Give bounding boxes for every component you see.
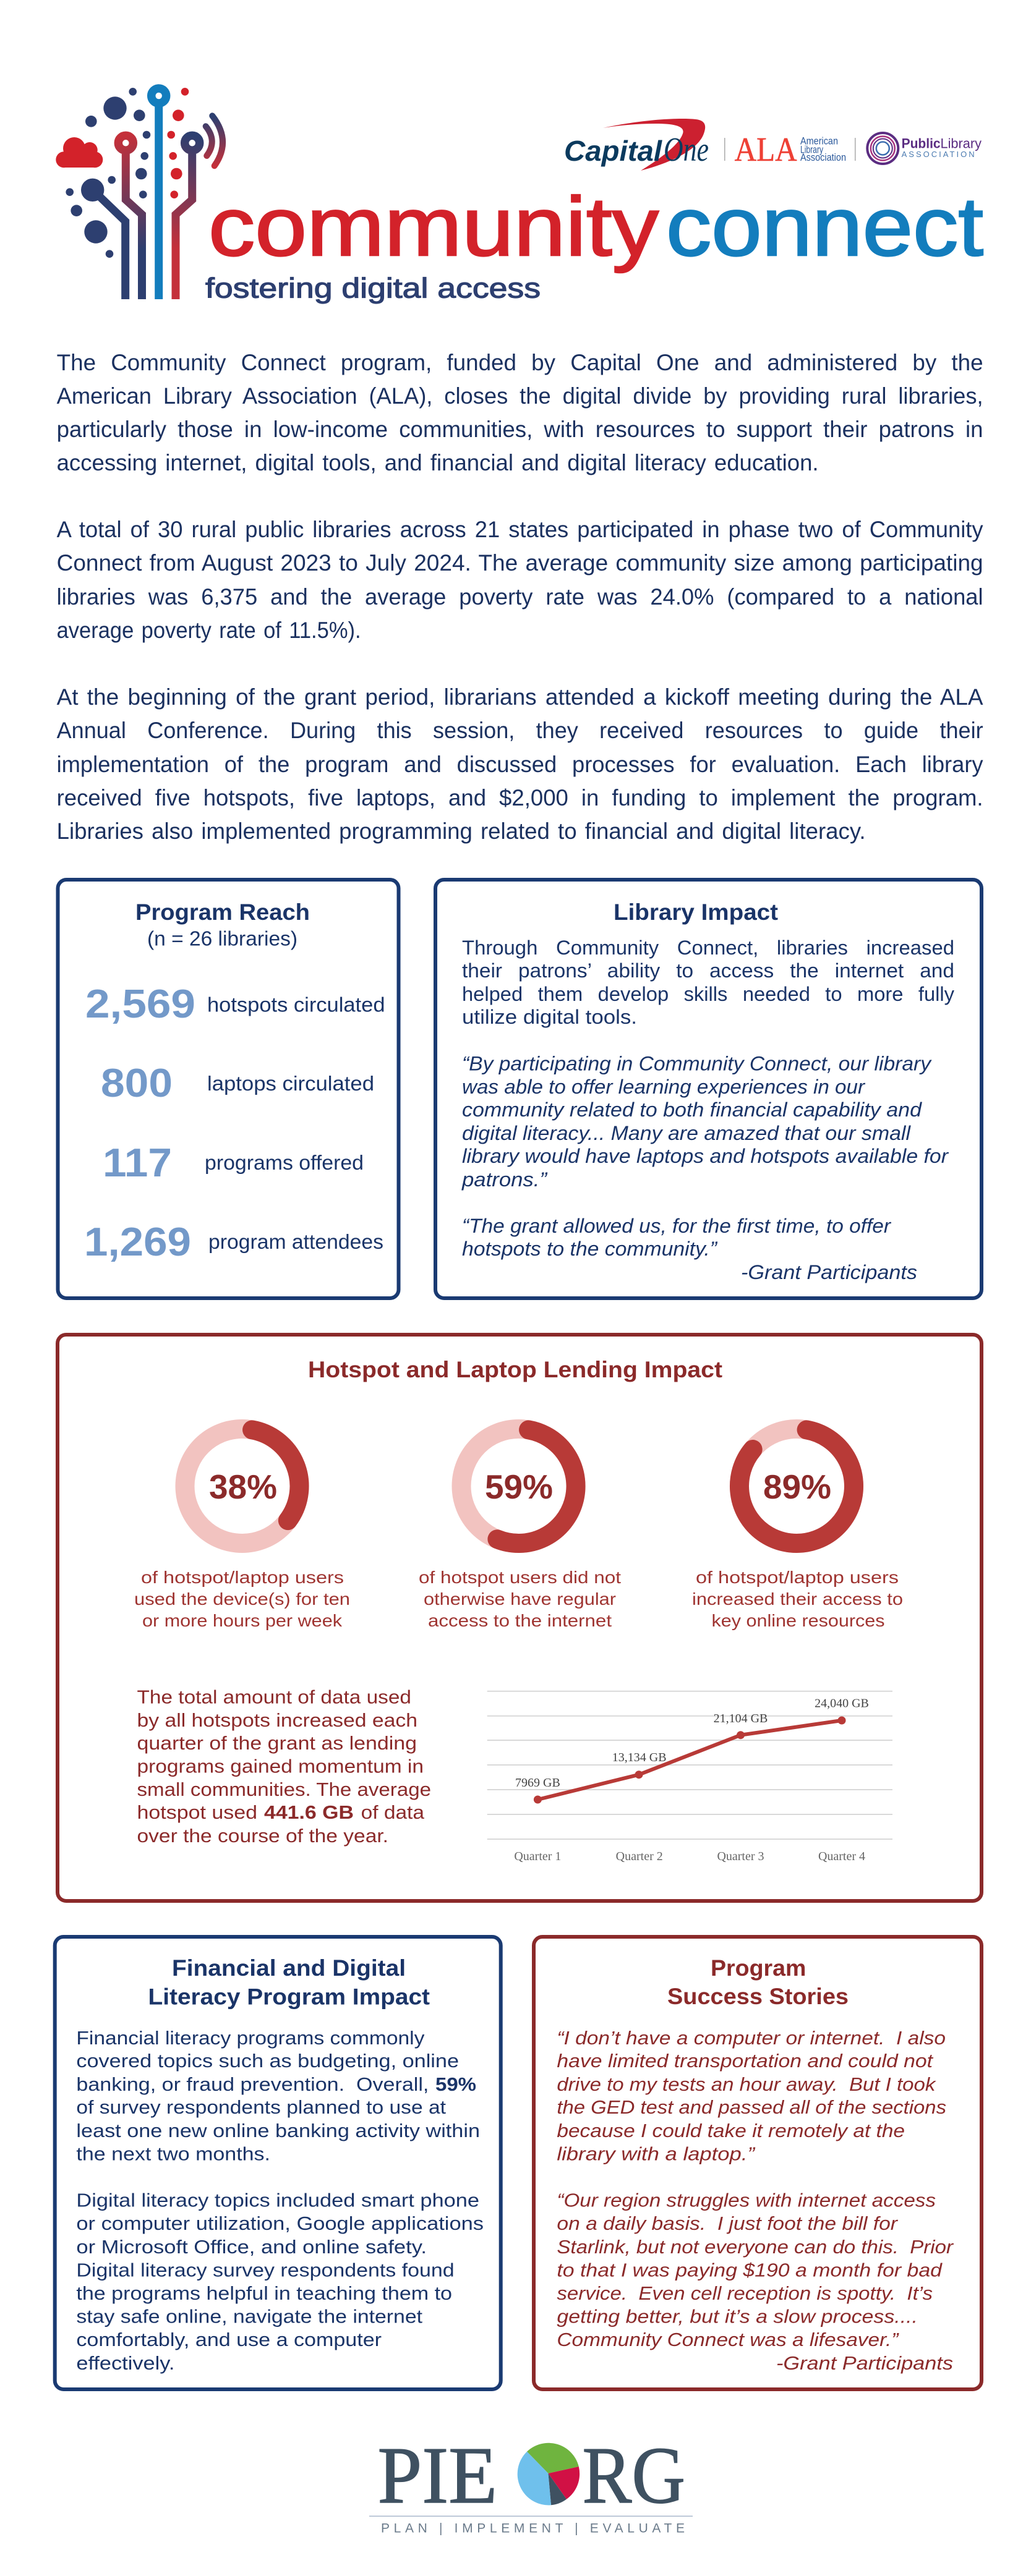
caption: 38 percent [134, 1568, 350, 1630]
donut: 59 percent: 59% [485, 1468, 553, 1506]
text block: digital literacy: comfortably, and use a computer [76, 2329, 382, 2350]
donut: 89 percent: 89% [763, 1468, 831, 1506]
caption: 59 percent: of hotspot users did not [419, 1568, 621, 1587]
stat: hotspots circulated: hotspots circulated [207, 993, 385, 1016]
text block: impact summary: helped them develop skills needed to more fully [462, 983, 954, 1005]
logo: PIE ORG: PLAN | IMPLEMENT | EVALUATE [381, 2522, 685, 2536]
stat: programs offered: 117 [103, 1140, 172, 1185]
caption: 38 percent: of hotspot/laptop users [141, 1568, 344, 1587]
caption: 38 percent: used the device(s) for ten [134, 1589, 350, 1609]
caption: 59 percent: access to the internet [428, 1611, 612, 1630]
text block: financial literacy: 59% [435, 2073, 476, 2095]
quote: first time hotspots: hotspots to the community.” [462, 1238, 717, 1260]
caption: 89 percent: of hotspot/laptop users [696, 1568, 899, 1587]
caption: 89 percent [692, 1568, 903, 1630]
text block: data usage: hotspot used [137, 1801, 257, 1823]
text block: participating libraries: A total of 30 rural public libraries across 21 states participated in phase two of Community [57, 517, 983, 542]
text block: participating libraries: average poverty rate of 11.5%). [57, 618, 361, 643]
stat: program attendees [84, 1219, 383, 1264]
text block: program introduction: accessing internet, digital tools, and financial and digital literacy education. [57, 450, 819, 475]
text block: data usage: by all hotspots increased each [137, 1709, 417, 1731]
quote: GED test [557, 2027, 946, 2165]
donut: 89 percent [739, 1429, 853, 1544]
text block: impact summary: Through Community Connect, libraries increased [462, 937, 954, 959]
panel: library impact [435, 880, 982, 1298]
text block: grant period: implementation of the program and discussed processes for evaluation. Each library [57, 752, 983, 777]
caption: 59 percent: otherwise have regular [424, 1589, 616, 1609]
quote: Starlink: to that I was paying $190 a month for bad [557, 2259, 943, 2281]
text block: program introduction: The Community Connect program, funded by Capital One and administered by the [57, 350, 983, 375]
quote: GED test: the GED test and passed all of the sections [557, 2096, 946, 2118]
quote: GED test: have limited transportation and could not [557, 2050, 933, 2072]
quote: Starlink: getting better, but it’s a slow process.... [557, 2306, 918, 2327]
panel: program reach [58, 880, 398, 1298]
quote: learning experiences: digital literacy... Many are amazed that our small [462, 1122, 911, 1144]
text block: data usage: of data [361, 1801, 425, 1823]
text block: financial literacy: of survey respondents planned to use at [76, 2096, 446, 2118]
donut: 38 percent [185, 1429, 299, 1543]
text block: grant period: Libraries also implemented programming related to financial and digital literacy. [57, 818, 866, 844]
text block: data usage: 441.6 GB [264, 1801, 354, 1823]
heading: financial and digital literacy: Literacy Program Impact [148, 1984, 430, 2009]
icon: signal waves [206, 116, 223, 166]
quote: learning experiences: community related to both financial capability and [462, 1099, 922, 1121]
text block: grant period: At the beginning of the grant period, librarians attended a kickoff meeting during the ALA [57, 684, 983, 710]
quote: GED test: because I could take it remotely at the [557, 2120, 905, 2141]
quote: learning experiences: “By participating in Community Connect, our library [462, 1052, 932, 1074]
stat: program attendees: program attendees [208, 1230, 383, 1253]
text block: grant period: received five hotspots, five laptops, and $2,000 in funding to implement the program. [57, 785, 983, 810]
logo: American Library Association: ALA [735, 130, 797, 168]
stat: program attendees: 1,269 [84, 1219, 191, 1264]
icon: pie chart [518, 2443, 580, 2505]
line chart: quarterly data usage: 24,040 GB [815, 1697, 869, 1711]
line chart: quarterly data usage: 13,134 GB [612, 1751, 667, 1764]
quote: learning experiences [461, 1052, 949, 1191]
text block: financial literacy: the next two months. [76, 2143, 270, 2165]
text block: digital literacy: effectively. [76, 2352, 174, 2374]
line chart: quarterly data usage: 7969 GB [515, 1776, 560, 1790]
text block: participating libraries: Connect from August 2023 to July 2024. The average community size among participating [57, 550, 983, 576]
stat: hotspots circulated: 2,569 [85, 981, 195, 1026]
attribution: -Grant Participants [776, 2352, 953, 2374]
quote: Starlink: Community Connect was a lifesaver.” [557, 2329, 899, 2350]
text block: digital literacy: Digital literacy survey respondents found [76, 2259, 455, 2281]
logo: Capital One: One [664, 130, 709, 168]
text block: program introduction: American Library Association (ALA), closes the digital divide by providing rural libraries, [57, 383, 983, 409]
line chart: quarterly data usage: Quarter 2 [616, 1850, 663, 1863]
quote: learning experiences: was able to offer learning experiences in our [462, 1076, 865, 1098]
text block: impact summary: utilize digital tools. [462, 1006, 637, 1028]
quote: first time hotspots: “The grant allowed us, for the first time, to offer [462, 1215, 891, 1237]
heading: lending impact: Hotspot and Laptop Lending Impact [308, 1357, 722, 1382]
text block: impact summary: their patrons’ ability to access the internet and [462, 959, 954, 982]
logo: Public Library Association: ASSOCIATION [902, 150, 975, 159]
text block: program introduction: particularly those in low-income communities, with resources to support their patrons in [57, 417, 983, 442]
quote: learning experiences: patrons.” [461, 1168, 547, 1191]
text block: data usage: quarter of the grant as lending [137, 1732, 417, 1754]
logo: Public Library Association: Public [902, 135, 941, 151]
icon: circuit traces [93, 88, 200, 299]
icon: cloud [56, 137, 103, 168]
text block: grant period: Annual Conference. During this session, they received resources to guide their [57, 718, 983, 743]
quote: GED test: library with a laptop.” [557, 2143, 756, 2165]
stat: laptops circulated [101, 1060, 374, 1105]
logo: Capital One [564, 119, 709, 171]
stat: hotspots circulated [85, 981, 385, 1026]
title: community connect: community [208, 180, 659, 273]
heading: financial and digital literacy: Financial and Digital [172, 1955, 406, 1981]
quote: GED test: “I don’t have a computer or internet. I also [557, 2027, 946, 2049]
logo: Public Library Association [867, 133, 982, 164]
panel: program success stories [534, 1937, 982, 2389]
text block: data usage [137, 1686, 431, 1847]
subtitle: fostering digital access [205, 273, 541, 304]
quote: Starlink: Starlink, but not everyone can do this. Prior [557, 2236, 954, 2258]
logo: Capital One: Capital [564, 135, 662, 167]
text block: financial literacy: banking, or fraud prevention. Overall, [76, 2073, 429, 2095]
line chart: quarterly data usage: Quarter 3 [717, 1850, 764, 1863]
text block: digital literacy: the programs helpful in teaching them to [76, 2282, 452, 2304]
logo: PIE ORG: RG [583, 2431, 685, 2520]
quote: Starlink: service. Even cell reception is spotty. It’s [557, 2282, 933, 2304]
caption: 89 percent: key online resources [711, 1611, 884, 1630]
text block: digital literacy: Digital literacy topics included smart phone [76, 2190, 479, 2211]
panel: hotspot and laptop lending impact [58, 1335, 982, 1901]
text block: data usage: The total amount of data used [137, 1686, 411, 1708]
text block: financial literacy [76, 2027, 480, 2165]
icon: circuit tree logo [56, 88, 223, 299]
text block: participating libraries [57, 517, 983, 643]
line chart: quarterly data usage [487, 1691, 892, 1863]
attribution: -Grant Participants [741, 1261, 917, 1283]
logo: PIE ORG [369, 2431, 693, 2536]
text block: impact summary [462, 937, 954, 1028]
title: community connect: connect [666, 180, 983, 273]
note: sample size: (n = 26 libraries) [147, 927, 297, 950]
logo: American Library Association: Association [800, 151, 846, 163]
quote: learning experiences: library would have laptops and hotspots available for [462, 1145, 949, 1167]
text block: financial literacy: least one new online banking activity within [76, 2120, 480, 2141]
quote: Starlink: “Our region struggles with internet access [557, 2190, 936, 2211]
line chart: quarterly data usage: 21,104 GB [714, 1712, 768, 1725]
stat: laptops circulated: laptops circulated [207, 1072, 374, 1095]
caption: 38 percent: or more hours per week [142, 1611, 343, 1630]
logo: American Library Association: Library [800, 143, 823, 156]
text block: data usage: small communities. The average [137, 1779, 431, 1800]
text block: digital literacy: stay safe online, navigate the internet [76, 2306, 422, 2327]
text block: financial literacy: covered topics such as budgeting, online [76, 2050, 459, 2072]
text block: financial literacy: Financial literacy programs commonly [76, 2027, 425, 2049]
line chart: quarterly data usage: Quarter 4 [818, 1850, 865, 1863]
text block: program introduction [57, 350, 983, 475]
text block: digital literacy [76, 2190, 484, 2374]
quote: Starlink [557, 2190, 954, 2350]
logo: PIE ORG: PIE [377, 2431, 497, 2520]
heading: program success stories [667, 1955, 849, 2009]
text block: data usage: over the course of the year. [137, 1825, 388, 1847]
stat: programs offered: programs offered [205, 1151, 364, 1174]
heading: program success stories: Success Stories [667, 1984, 849, 2009]
caption: 59 percent [419, 1568, 621, 1630]
donut: 59 percent [461, 1429, 576, 1544]
panel: financial and digital literacy program impact [55, 1937, 501, 2389]
icon: red dots [167, 88, 189, 198]
text block: data usage: programs gained momentum in [137, 1756, 424, 1777]
quote: Starlink: on a daily basis. I just foot the bill for [557, 2213, 899, 2234]
heading: program reach: Program Reach [135, 899, 310, 925]
line chart: quarterly data usage: Quarter 1 [514, 1850, 561, 1863]
logo: American Library Association [735, 130, 846, 168]
text block: digital literacy: or Microsoft Office, and online safety. [76, 2236, 427, 2258]
heading: program success stories: Program [711, 1955, 806, 1981]
heading: financial and digital literacy [148, 1955, 430, 2009]
text block: grant period [57, 684, 983, 844]
stat: programs offered [103, 1140, 364, 1185]
donut: 38 percent: 38% [209, 1468, 277, 1506]
stat: laptops circulated: 800 [101, 1060, 173, 1105]
quote: GED test: drive to my tests an hour away. But I took [557, 2073, 936, 2095]
title: community connect [208, 180, 983, 273]
caption: 89 percent: increased their access to [692, 1589, 903, 1609]
heading: library impact: Library Impact [614, 899, 778, 925]
quote: first time hotspots [462, 1215, 891, 1260]
text block: digital literacy: or computer utilization, Google applications [76, 2213, 484, 2234]
text block: participating libraries: libraries was 6,375 and the average poverty rate was 24.0% (compared to a national [57, 584, 983, 610]
logo: American Library Association: American [800, 135, 838, 147]
logo: Public Library Association: Library [940, 135, 982, 151]
icon: navy dots [66, 88, 150, 258]
